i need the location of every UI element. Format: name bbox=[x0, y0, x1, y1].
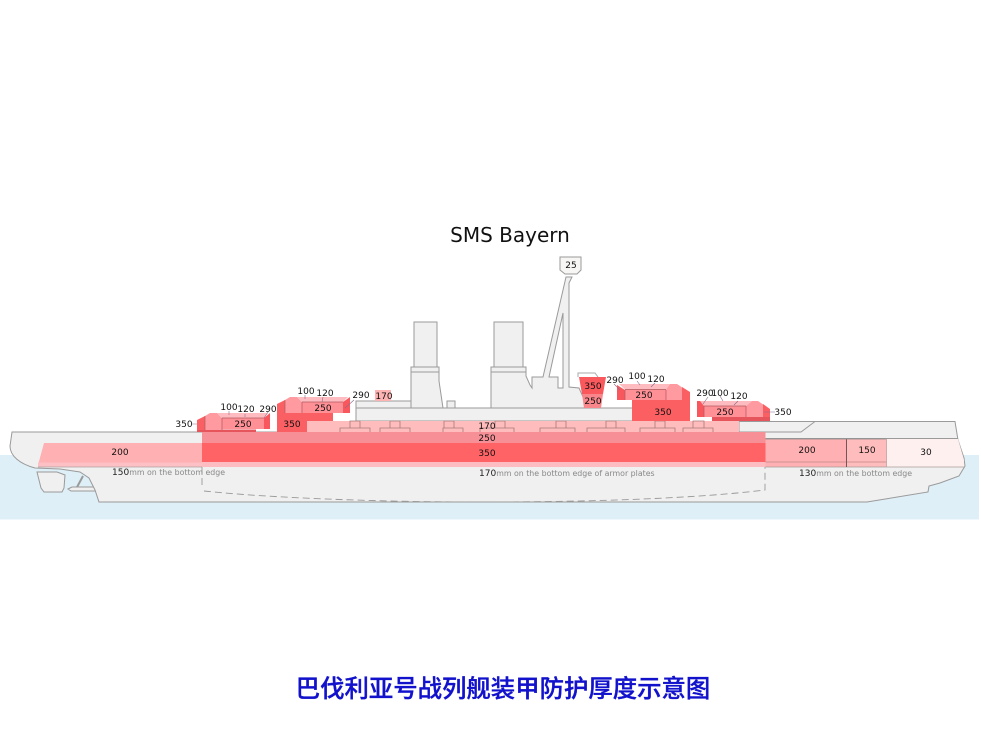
barbette B bbox=[277, 413, 333, 432]
armor thickness labels: 100 bbox=[297, 387, 315, 397]
armor box 170 bbox=[375, 390, 391, 401]
superstructure bbox=[356, 257, 642, 421]
funnel 2 and mast base bbox=[491, 277, 588, 408]
armor thickness labels: 290 bbox=[352, 391, 370, 401]
armor thickness labels: 200 bbox=[798, 446, 816, 456]
armor thickness labels: 350 bbox=[774, 408, 792, 418]
hull bbox=[10, 422, 965, 502]
armor thickness labels: 25 bbox=[565, 261, 577, 271]
armor thickness labels bbox=[111, 261, 932, 459]
conning tower cap bbox=[578, 373, 598, 377]
small vent bbox=[447, 401, 455, 408]
armor thickness labels: 100 bbox=[711, 389, 729, 399]
upper citadel armor bbox=[307, 421, 739, 432]
conning tower armor bbox=[579, 377, 606, 408]
central armor belt bbox=[202, 432, 766, 467]
barbette C bbox=[632, 400, 690, 421]
armor thickness labels: 120 bbox=[237, 405, 255, 415]
armor thickness labels: 250 bbox=[478, 434, 496, 444]
turret D bbox=[697, 401, 770, 421]
barbette mounts bbox=[340, 421, 713, 432]
chinese caption: 巴伐利亚号战列舰装甲防护厚度示意图 bbox=[296, 676, 710, 703]
water bbox=[0, 455, 979, 520]
armor thickness labels: 250 bbox=[716, 408, 734, 418]
armor thickness labels: 290 bbox=[606, 376, 624, 386]
central bottom edge note: 170mm on the bottom edge of armor plates bbox=[479, 469, 655, 479]
armor thickness labels: 170 bbox=[478, 422, 496, 432]
funnel 1 bbox=[411, 322, 443, 408]
armor thickness labels: 350 bbox=[175, 420, 193, 430]
turret B bbox=[277, 397, 350, 413]
leader lines bbox=[192, 381, 775, 424]
bow bottom edge note: 130mm on the bottom edge bbox=[799, 469, 912, 479]
rudder bbox=[37, 472, 65, 492]
fire control top bbox=[560, 257, 581, 274]
title: SMS Bayern: SMS Bayern bbox=[450, 223, 570, 247]
lower deckhouse bbox=[356, 408, 642, 421]
armor thickness labels: 350 bbox=[654, 408, 672, 418]
turret C bbox=[617, 384, 690, 400]
armor thickness labels: 150 bbox=[858, 446, 876, 456]
armor thickness labels: 350 bbox=[584, 382, 602, 392]
armor thickness labels: 120 bbox=[316, 389, 334, 399]
upper deckhouse aft bbox=[356, 401, 414, 408]
stern armor belt bbox=[38, 443, 202, 467]
turret A bbox=[197, 413, 270, 432]
armor thickness labels: 350 bbox=[283, 420, 301, 430]
armor thickness labels: 250 bbox=[314, 404, 332, 414]
armor thickness labels: 200 bbox=[111, 448, 129, 458]
stern bottom edge note: 150mm on the bottom edge bbox=[112, 468, 225, 478]
bow armor belt bbox=[766, 439, 964, 467]
armor thickness labels: 290 bbox=[696, 389, 714, 399]
armor thickness labels: 250 bbox=[635, 391, 653, 401]
underwater protection dashed line bbox=[202, 467, 765, 502]
armor thickness labels: 30 bbox=[920, 448, 932, 458]
ship bbox=[10, 257, 965, 502]
propeller strut bbox=[76, 476, 83, 489]
armor thickness labels: 100 bbox=[628, 372, 646, 382]
armor thickness labels: 120 bbox=[730, 392, 748, 402]
armor thickness labels: 250 bbox=[234, 420, 252, 430]
armor thickness labels: 120 bbox=[647, 375, 665, 385]
armor thickness labels: 170 bbox=[375, 392, 393, 402]
armor thickness labels: 100 bbox=[220, 403, 238, 413]
armor thickness labels: 250 bbox=[584, 397, 602, 407]
propeller shaft bbox=[68, 487, 96, 491]
armor thickness labels: 350 bbox=[478, 449, 496, 459]
armor thickness labels: 290 bbox=[259, 405, 277, 415]
